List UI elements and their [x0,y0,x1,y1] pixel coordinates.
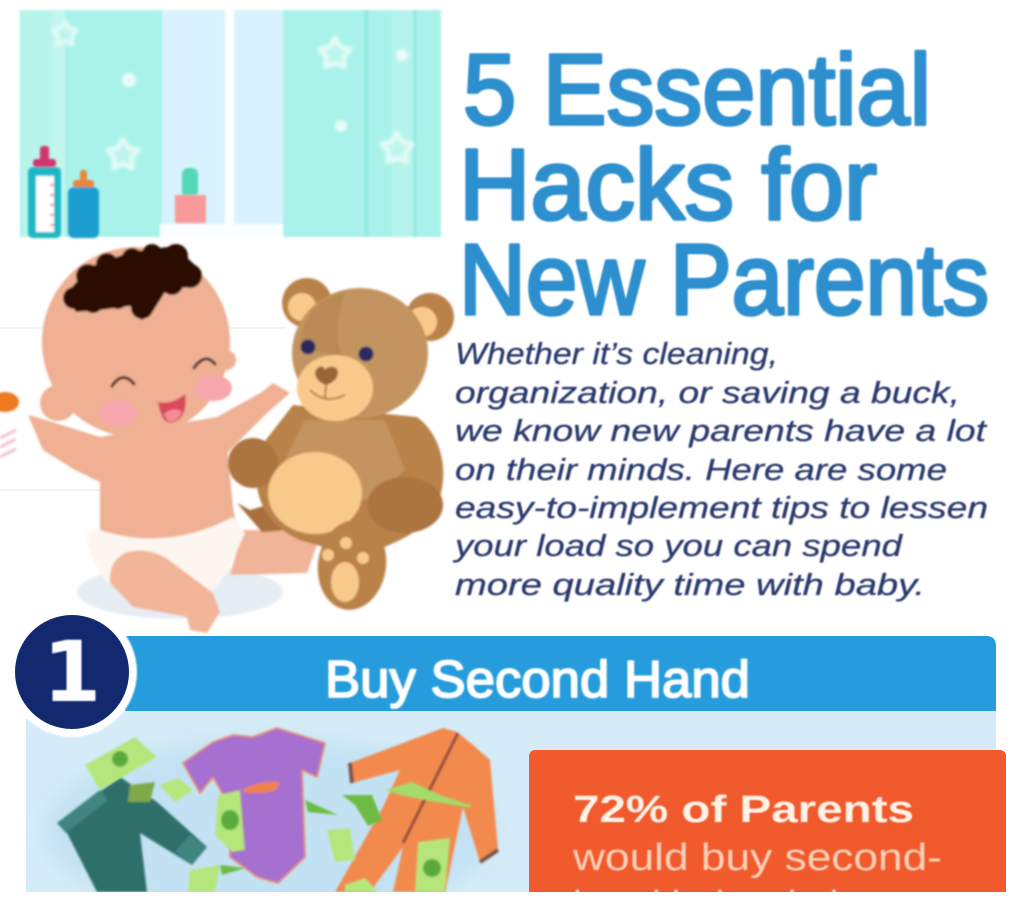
teddy ears [282,278,454,341]
icon: potted plant [175,168,206,223]
diaper [87,517,245,598]
title: Hacks for [459,129,877,241]
illustration: orange pajamas [335,728,498,892]
baby arms [28,383,290,482]
illustration: purple bodysuit [183,728,325,883]
baby hair [63,244,202,320]
callout: 72% of parents: 72% of Parents [573,789,914,831]
number badge: 1 [43,623,101,721]
baby body [100,425,240,550]
teddy head [292,288,428,418]
baby leg left [110,551,220,633]
window scene with curtains [20,10,441,238]
intro paragraph: on their minds. Here are some [455,452,947,487]
title: New Parents [459,224,989,336]
illustration: teddy bear [228,278,454,614]
baby leg right [230,530,317,575]
teddy foot [312,516,392,614]
intro paragraph: your load so you can spend [453,528,904,563]
number badge [15,615,138,738]
callout: 72% of parents: would buy second- [572,837,942,879]
icon: pink baby bottle [28,146,61,238]
panel: buy second hand [7,607,1006,902]
intro paragraph: Whether it’s cleaning, [455,336,778,371]
section heading: Buy Second Hand [325,651,750,709]
illustration: flying money [85,737,472,892]
title [459,34,989,336]
teddy body [256,405,443,558]
icon: blue baby bottle [68,170,99,238]
baby head [42,247,230,437]
baby face [99,359,232,426]
intro paragraph: more quality time with baby. [455,567,925,602]
intro paragraph: organization, or saving a buck, [455,375,960,410]
teddy tail [237,503,290,532]
intro paragraph: easy-to-implement tips to lessen [455,490,988,525]
intro paragraph [453,336,988,602]
callout: 72% of parents [529,750,1006,902]
illustration: baby [28,244,317,633]
icon: cropped bottle at left edge [0,392,19,457]
title: 5 Essential [463,34,931,146]
intro paragraph: we know new parents have a lot [455,413,988,448]
window stars and dots [53,21,412,168]
section header bar [125,636,996,711]
illustration: green pants [57,777,207,892]
